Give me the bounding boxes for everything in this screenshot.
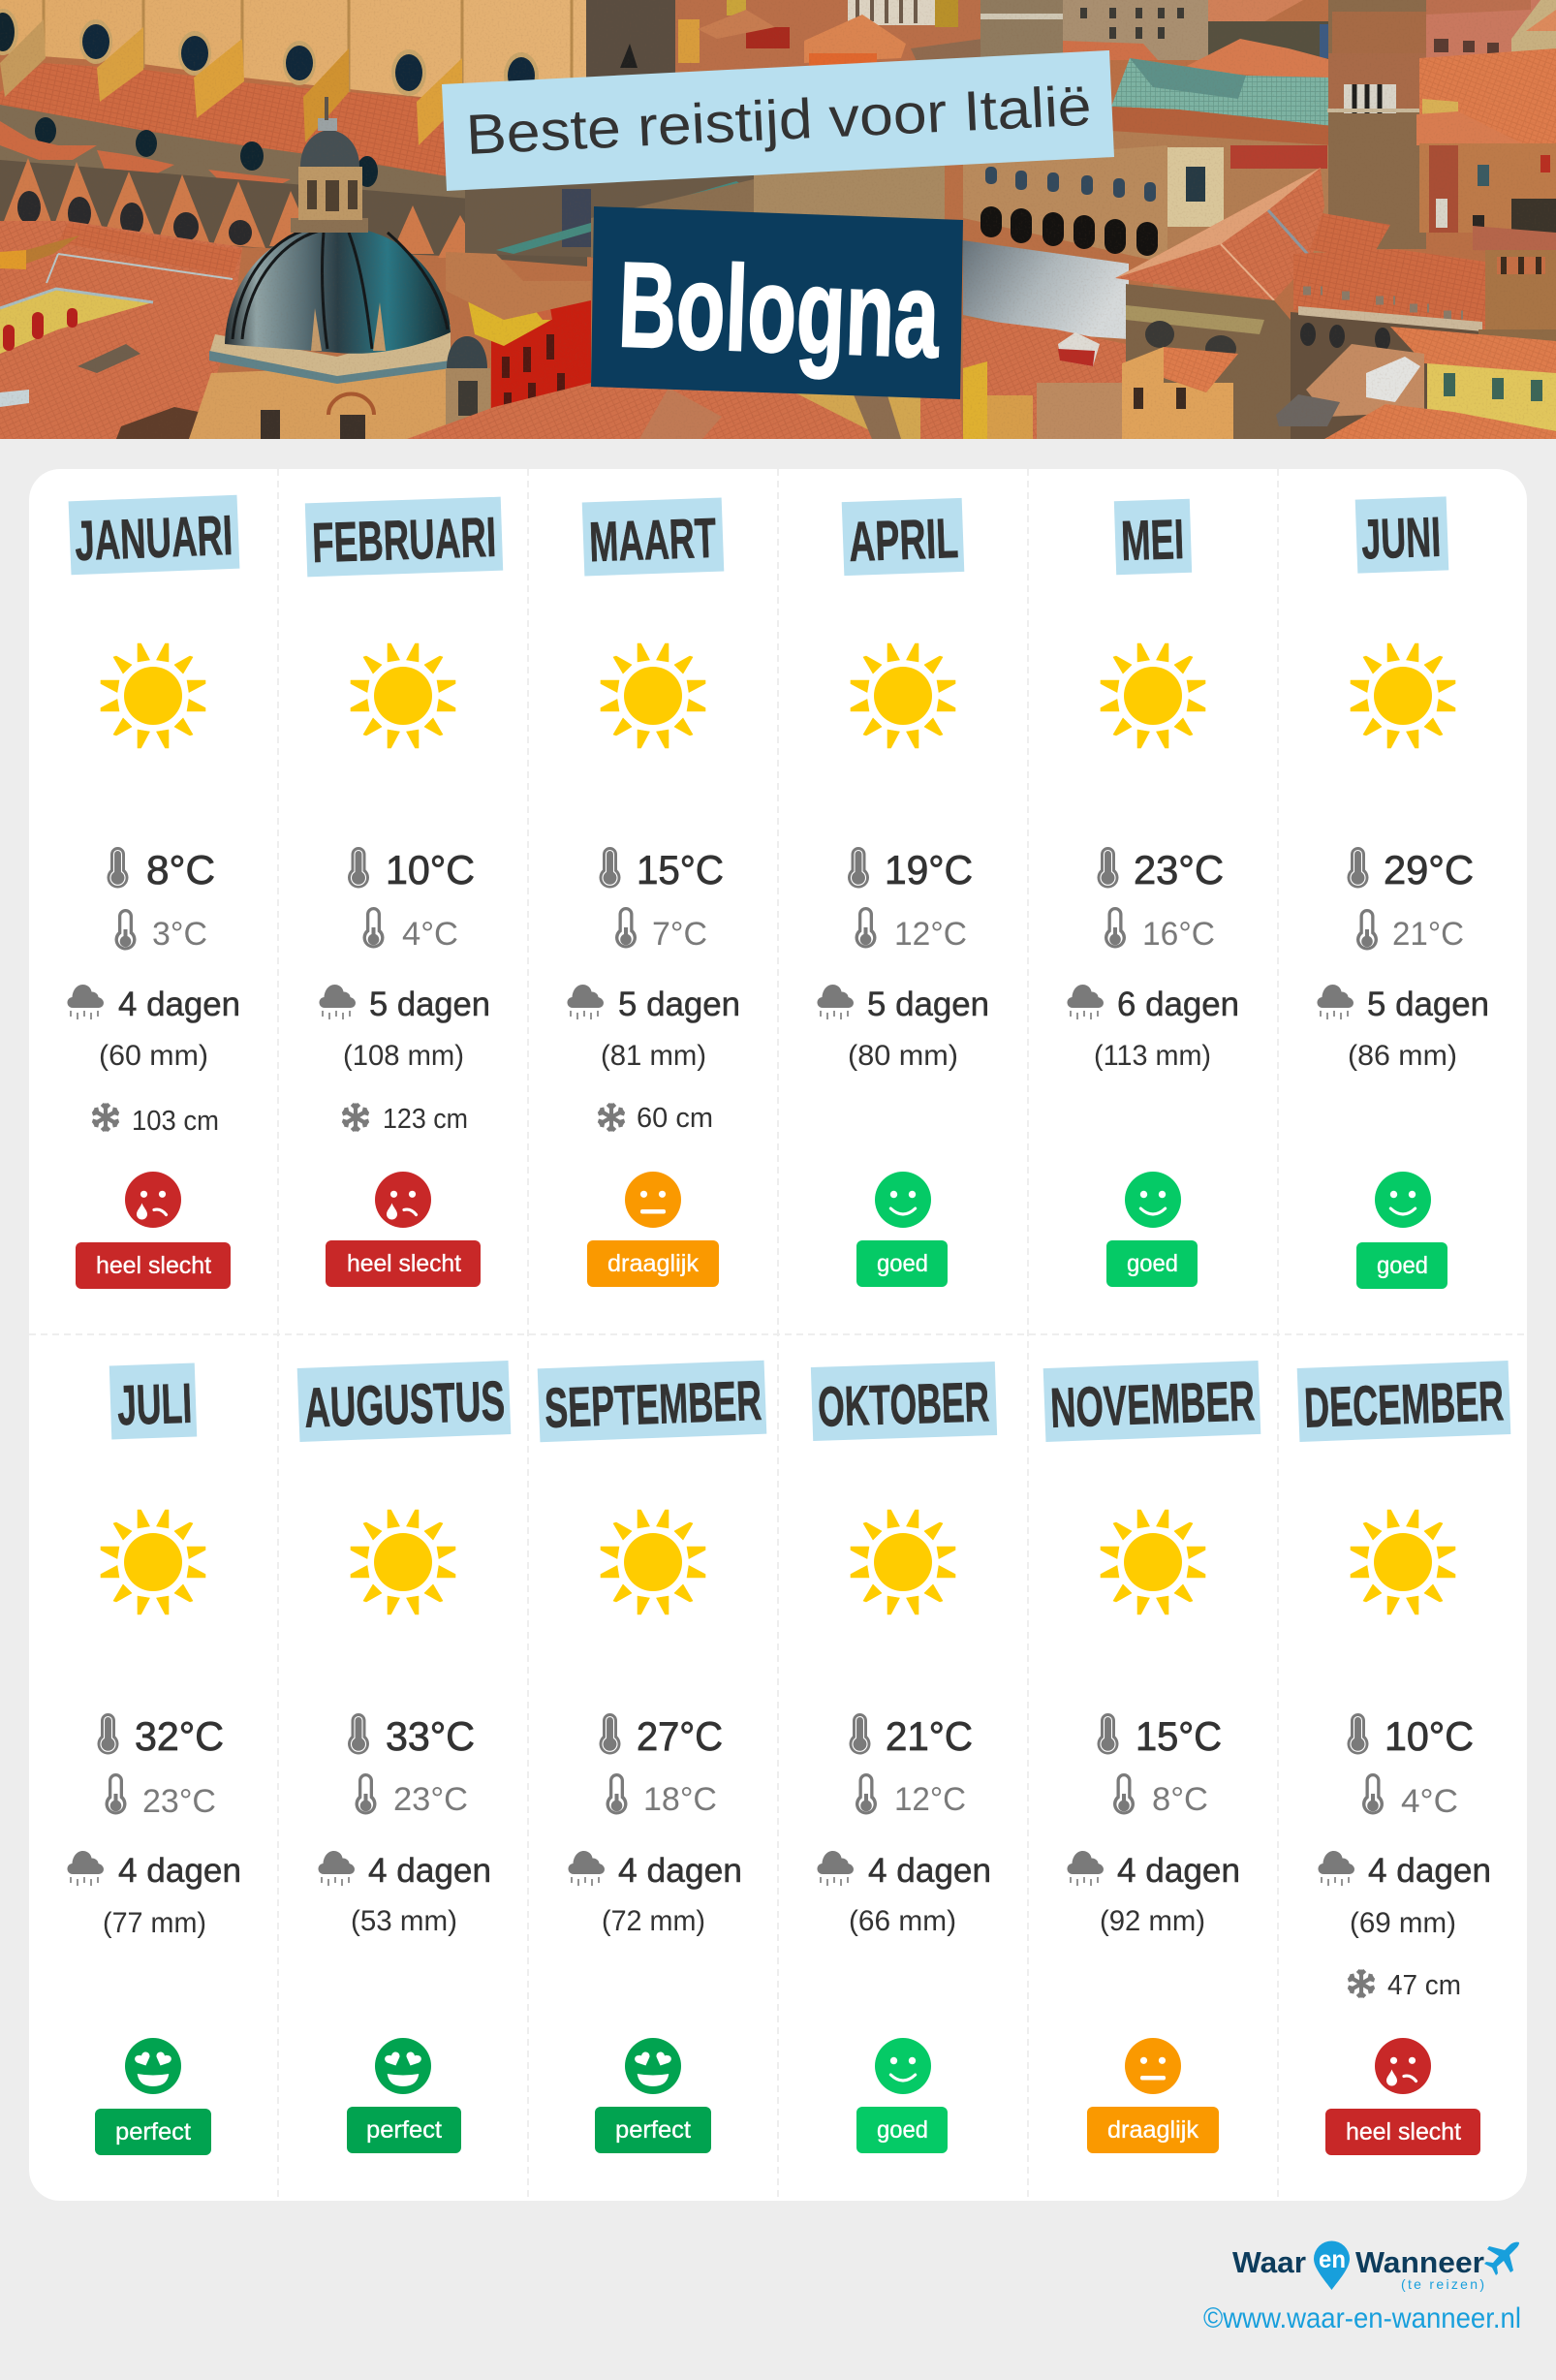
icon: plane [1484, 2242, 1519, 2275]
icon: max temperature [348, 847, 369, 889]
rating badge [347, 2107, 461, 2153]
month heading: november: NOVEMBER [1049, 1369, 1256, 1440]
month heading: juli: JULI [116, 1372, 193, 1437]
column: april [817, 498, 989, 1287]
rainfall: (113 mm) [1094, 1040, 1211, 1072]
snowfall: 123 cm [383, 1104, 468, 1135]
icon: rain [319, 985, 356, 1019]
icon: max temperature [599, 1713, 620, 1755]
rainfall: (69 mm) [1350, 1907, 1456, 1939]
panel: monthly climate table [29, 469, 1527, 2201]
rainfall: (108 mm) [343, 1040, 464, 1072]
dome [225, 227, 451, 354]
icon: snow [598, 1103, 625, 1132]
rating badge [1356, 1242, 1447, 1289]
month heading: februari [305, 497, 503, 577]
icon: sun [851, 643, 955, 748]
icon: max temperature [848, 847, 869, 889]
column: augustus [297, 1361, 511, 2153]
icon: min temperature [105, 1773, 126, 1815]
right upper buildings [1426, 0, 1556, 58]
icon: min temperature [1356, 909, 1378, 951]
roofs below piazza [963, 318, 1126, 439]
icon: rain [1067, 985, 1104, 1019]
column: februari [305, 497, 503, 1287]
icon: min temperature [1362, 1773, 1384, 1815]
rainfall: (60 mm) [99, 1040, 208, 1072]
icon: min temperature [362, 907, 384, 949]
min temperature value: 3°C [152, 916, 207, 953]
icon: sun [1101, 643, 1205, 748]
icon: sun [601, 643, 705, 748]
small dome [446, 368, 490, 426]
rain days: 6 dagen [1117, 986, 1239, 1023]
min temperature value: 21°C [1392, 916, 1464, 953]
rainfall: (86 mm) [1348, 1040, 1457, 1072]
column: januari [67, 495, 240, 1289]
icon: max temperature [97, 1713, 118, 1755]
city banner: Bologna: Bologna [616, 237, 943, 384]
rating badge: draaglijk [607, 1250, 699, 1277]
stone band [0, 105, 587, 252]
rain days: 5 dagen [867, 986, 989, 1023]
rating badge: goed [877, 1250, 928, 1277]
rating badge: perfect [366, 2116, 442, 2144]
max temperature value: 10°C [386, 847, 475, 892]
centre bottom roofs [407, 383, 963, 439]
rain days: 4 dagen [1117, 1852, 1240, 1890]
icon: smiling face [1375, 1172, 1431, 1228]
rainfall: (92 mm) [1100, 1905, 1205, 1937]
rating badge: draaglijk [1107, 2116, 1198, 2144]
icon: sun [101, 1510, 205, 1614]
icon: snow [1348, 1969, 1375, 1998]
min temperature value: 23°C [393, 1781, 468, 1818]
min temperature value: 16°C [1142, 916, 1215, 953]
icon: min temperature [615, 907, 637, 949]
rating badge: perfect [615, 2116, 691, 2144]
lantern [291, 218, 368, 233]
icon: max temperature [1347, 1713, 1368, 1755]
small roof below tower [1310, 213, 1390, 259]
icon: heart-eyes face [625, 2038, 681, 2094]
rating badge: goed [1377, 1252, 1428, 1279]
min temperature value: 23°C [142, 1783, 216, 1820]
month heading: mei [1114, 499, 1192, 575]
icon: sun [1101, 1510, 1205, 1614]
icon: sun [1351, 643, 1455, 748]
min temperature value: 4°C [402, 916, 458, 953]
snowfall: 60 cm [637, 1103, 713, 1134]
max temperature value: 21°C [886, 1713, 973, 1759]
rating badge [856, 1240, 948, 1287]
rain days: 4 dagen [118, 986, 240, 1023]
photo grain [0, 0, 1556, 439]
tower [1328, 0, 1426, 249]
rainfall: (77 mm) [103, 1907, 206, 1939]
rating badge: goed [877, 2116, 928, 2144]
max temperature value: 27°C [637, 1713, 723, 1759]
icon: max temperature [599, 847, 620, 889]
icon: rain [67, 985, 104, 1019]
month heading: augustus [297, 1361, 511, 1442]
max temperature value: 23°C [1134, 847, 1224, 892]
rating badge: heel slecht [347, 1250, 461, 1277]
rain days: 5 dagen [1367, 986, 1489, 1023]
rainfall: (66 mm) [849, 1905, 956, 1937]
rainfall: (53 mm) [351, 1905, 457, 1937]
month heading: april: APRIL [848, 507, 959, 574]
min temperature value: 12°C [894, 916, 967, 953]
hero photo: aerial view of Bologna [0, 0, 1556, 439]
max temperature value: 19°C [885, 847, 973, 892]
column: maart [567, 498, 740, 1287]
icon: snow [92, 1103, 119, 1132]
rating badge [76, 1242, 231, 1289]
month heading: juni [1355, 496, 1448, 574]
red and yellow houses [491, 284, 591, 436]
month heading: januari [69, 495, 239, 575]
icon: heart-eyes face [125, 2038, 181, 2094]
rain days: 5 dagen [618, 986, 740, 1023]
icon: smiling face [1125, 1172, 1181, 1228]
month heading: juli [109, 1363, 197, 1439]
title banner: Beste reistijd voor Italië [442, 50, 1114, 191]
rating badge [856, 2107, 948, 2153]
rain days: 4 dagen [1368, 1852, 1491, 1890]
logo: Waar en Wanneer [1232, 2240, 1519, 2292]
min temperature value: 12°C [894, 1781, 966, 1818]
icon: crying face [375, 1172, 431, 1228]
website credit: ©www.waar-en-wanneer.nl [1203, 2302, 1521, 2334]
icon: rain [567, 985, 604, 1019]
icon: rain [1067, 1851, 1104, 1886]
min temperature value: 18°C [643, 1781, 717, 1818]
rating badge: perfect [115, 2118, 191, 2145]
icon: min temperature [1113, 1773, 1135, 1815]
icon: max temperature [1097, 847, 1118, 889]
palazzo [963, 107, 1332, 291]
tower top centre and old town [586, 0, 675, 78]
centre stone walls [465, 160, 765, 262]
rainfall: (80 mm) [848, 1040, 958, 1072]
icon: max temperature [1097, 1713, 1118, 1755]
month heading: augustus: AUGUSTUS [303, 1369, 506, 1440]
rating badge: heel slecht [1346, 2118, 1461, 2145]
icon: rain [318, 1851, 355, 1886]
month heading: februari: FEBRUARI [311, 506, 497, 575]
rating badge [595, 2107, 711, 2153]
min temperature value: 7°C [652, 916, 707, 953]
icon: rain [568, 1851, 605, 1886]
logo word: Wanneer: Wanneer [1355, 2245, 1484, 2279]
title banner: Beste reistijd voor Italië: Beste reistijd voor Italië [465, 75, 1093, 167]
icon: snow [342, 1103, 369, 1132]
logo tagline: (te reizen) [1401, 2276, 1484, 2292]
rain days: 4 dagen [618, 1852, 742, 1890]
month heading: september: SEPTEMBER [544, 1369, 762, 1440]
icon: sun [351, 1510, 455, 1614]
buttresses [0, 19, 46, 97]
column: juli [67, 1363, 241, 2155]
rainfall: (72 mm) [602, 1905, 705, 1937]
logo pin [1314, 2240, 1350, 2290]
rating badge [326, 1240, 481, 1287]
icon: min temperature [114, 909, 136, 951]
rating badge [1325, 2109, 1480, 2155]
month heading: mei: MEI [1120, 508, 1185, 573]
max temperature value: 15°C [637, 847, 724, 892]
icon: neutral face [1125, 2038, 1181, 2094]
month heading: maart: MAART [588, 507, 717, 574]
piazza [963, 240, 1129, 339]
rating badge: goed [1127, 1250, 1178, 1277]
lower left roofs [0, 221, 242, 439]
green roof [1111, 58, 1332, 126]
icon: sun [101, 643, 205, 748]
month heading: oktober: OKTOBER [817, 1370, 990, 1439]
icon: min temperature [355, 1773, 376, 1815]
rating badge [1087, 2107, 1219, 2153]
icon: sun [1351, 1510, 1455, 1614]
month heading: september [538, 1361, 766, 1442]
logo pin: en [1319, 2246, 1346, 2273]
icon: crying face [1375, 2038, 1431, 2094]
rating badge [95, 2109, 211, 2155]
column: juni [1317, 496, 1489, 1289]
month heading: januari: JANUARI [74, 504, 233, 573]
upper roof row [0, 63, 587, 199]
right bottom [1478, 329, 1556, 359]
max temperature value: 8°C [146, 847, 215, 892]
brown palace [1126, 284, 1291, 439]
rain days: 4 dagen [868, 1852, 991, 1890]
month heading: april [842, 498, 964, 576]
dome building [189, 363, 489, 439]
crenellated roof and right side [1293, 249, 1485, 329]
rain days: 4 dagen [118, 1852, 241, 1890]
column: oktober [811, 1362, 997, 2153]
icon: min temperature [855, 907, 876, 949]
rain days: 4 dagen [368, 1852, 491, 1890]
rating badge [587, 1240, 719, 1287]
icon: rain [1317, 985, 1354, 1019]
snowfall: 103 cm [132, 1106, 219, 1137]
column: december [1297, 1361, 1510, 2155]
icon: rain [1318, 1851, 1354, 1886]
cathedral wall [0, 0, 587, 107]
icon: sun [601, 1510, 705, 1614]
icon: rain [67, 1851, 104, 1886]
min temperature value: 4°C [1401, 1783, 1458, 1820]
icon: smiling face [875, 1172, 931, 1228]
big roof [1115, 168, 1324, 300]
rating badge [1106, 1240, 1198, 1287]
icon: sun [351, 643, 455, 748]
max temperature value: 10°C [1385, 1713, 1474, 1759]
icon: rain [817, 985, 854, 1019]
yellow courtyard building [0, 289, 153, 354]
icon: min temperature [607, 1773, 628, 1815]
month heading: maart [582, 498, 724, 576]
month heading: oktober [811, 1362, 997, 1441]
max temperature value: 32°C [135, 1713, 224, 1759]
beige buildings top right [980, 0, 1068, 58]
max temperature value: 33°C [386, 1713, 475, 1759]
month heading: november [1043, 1361, 1260, 1442]
max temperature value: 15°C [1136, 1713, 1222, 1759]
icon: max temperature [849, 1713, 870, 1755]
icon: min temperature [856, 1773, 877, 1815]
icon: neutral face [625, 1172, 681, 1228]
logo word: Waar: Waar [1232, 2245, 1306, 2279]
icon: crying face [125, 1172, 181, 1228]
city banner: Bologna [591, 206, 963, 399]
icon: max temperature [107, 847, 128, 889]
icon: smiling face [875, 2038, 931, 2094]
icon: max temperature [348, 1713, 369, 1755]
column: mei [1067, 499, 1239, 1287]
snowfall: 47 cm [1387, 1970, 1461, 2001]
rainfall: (81 mm) [601, 1040, 706, 1072]
column: september [538, 1361, 766, 2153]
rating badge: heel slecht [96, 1252, 211, 1279]
column: november [1043, 1361, 1260, 2153]
icon: rain [817, 1851, 854, 1886]
gothic gables [0, 160, 587, 266]
icon: min temperature [1105, 907, 1126, 949]
icon: sun [851, 1510, 955, 1614]
arcade [980, 206, 1158, 256]
icon: heart-eyes face [375, 2038, 431, 2094]
min temperature value: 8°C [1152, 1781, 1208, 1818]
icon: max temperature [1347, 847, 1368, 889]
max temperature value: 29°C [1384, 847, 1474, 892]
rain days: 5 dagen [369, 986, 490, 1023]
month heading: juni: JUNI [1360, 506, 1442, 571]
